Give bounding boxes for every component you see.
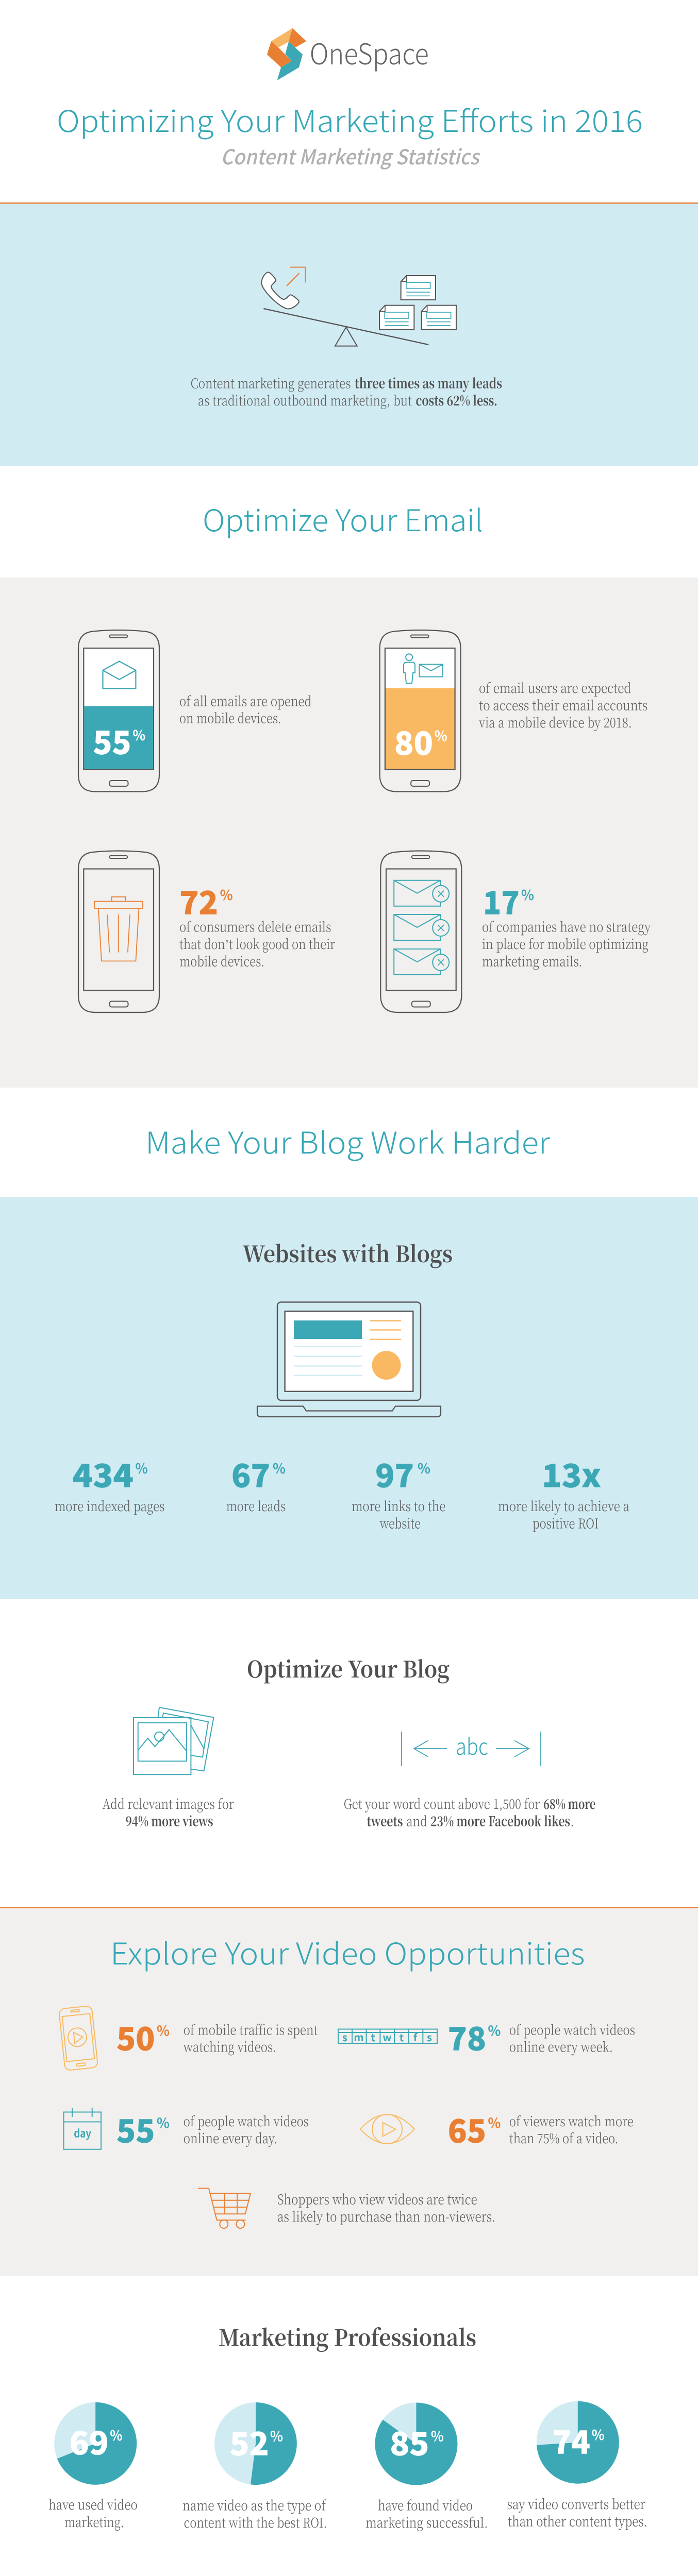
text: word count stat: Get your word count above 1,500 for [344,1794,540,1813]
stat: 97 percent: 97 [375,1450,414,1497]
text: word count stat: tweets [367,1811,403,1831]
subheading: marketing professionals: Marketing Professionals [219,2319,476,2352]
icon: week calendar: m [354,2029,364,2044]
stat: 67 percent: 67 [231,1450,270,1497]
icon: laptop [257,1302,441,1417]
text: content marketing stat: costs 62% less. [416,391,497,410]
text: 69 percent label: have used video [48,2495,138,2514]
pie chart: 85 percent: % [431,2426,444,2446]
phone: 80 percent: % [435,725,447,745]
icon: week calendar: f [413,2029,418,2044]
icon: week calendar: t [400,2029,404,2044]
pie chart: 52 percent: 52 [230,2418,269,2464]
stat: 13x: positive ROI [533,1514,599,1533]
text: shoppers stat [277,2189,495,2226]
icon: week calendar: t [371,2029,375,2044]
panel: email stats [0,578,698,1088]
text: images stat [103,1794,234,1831]
text: 52 percent label [182,2496,327,2532]
phone: trash can [78,851,159,1012]
text: content marketing stat: as traditional outbound marketing, but [198,391,412,410]
icon: week calendar: s [342,2029,347,2044]
stat: 50 percent: watching videos. [183,2037,276,2056]
phone: 80 percent [380,630,461,791]
icon: word count arrows [402,1728,541,1766]
text: 55 percent [179,691,311,727]
heading: make your blog work harder: Make Your Blog Work Harder [145,1119,550,1162]
pie chart: 74 percent: 74 [553,2416,590,2463]
text: 74 percent label [507,2494,647,2531]
text: 80 percent: of email users are expected [479,678,631,697]
stat: 13x: more likely to achieve a [498,1496,629,1515]
stat: 65 percent video: 65 [448,2105,486,2151]
icon: word count arrows: abc [456,1728,488,1761]
header logo: OneSpace [310,31,429,73]
text: 55 percent: on mobile devices. [179,708,281,727]
stat: 65 percent video: than 75% of a video. [509,2128,618,2147]
text: 17 percent [482,877,651,970]
text: 52 percent label: name video as the type of [182,2496,327,2515]
text: images stat: 94% more views [126,1811,213,1831]
text: 85 percent label: have found video [378,2496,473,2515]
stat: 67 percent: more leads [226,1496,286,1515]
stat: 55 percent video: % [157,2112,170,2132]
stat: 50 percent: 50 [117,2013,155,2060]
text: word count stat: . [570,1811,574,1831]
stat: 434 percent: 434 [73,1450,134,1497]
stat: 434 percent [55,1450,165,1515]
icon: photos [134,1707,213,1774]
text: content marketing stat [191,373,502,410]
text: 52 percent label: content with the best ROI. [184,2513,327,2532]
icon: week calendar: s [427,2029,432,2044]
stat: 67 percent [226,1450,286,1515]
stat: 50 percent: % [157,2020,170,2040]
pie chart: 85 percent: 85 [390,2418,429,2464]
phone: 55 percent: % [132,724,145,744]
text: images stat: Add relevant images for [103,1794,234,1813]
phone: 55 percent [78,630,159,791]
text: 72 percent: that don’t look good on their [179,934,335,953]
text: word count stat: 23% more Facebook likes [430,1811,570,1831]
text: 85 percent label: marketing successful. [365,2513,488,2532]
phone: 80 percent: 80 [394,718,433,764]
stat: 55 percent video [117,2105,309,2151]
pie chart: 74 percent: % [592,2424,605,2444]
text: 72 percent: 72 [179,877,218,923]
text: 69 percent label: marketing. [64,2512,124,2531]
stat: 50 percent [117,2013,318,2060]
text: 17 percent: marketing emails. [482,951,583,970]
stat: 97 percent: more links to the [352,1496,445,1515]
pie chart: 85 percent [375,2402,457,2485]
stat: 78 percent: % [488,2020,501,2040]
text: content marketing stat: Content marketing generates [191,373,351,392]
text: 69 percent label [48,2495,138,2531]
panel: content marketing leads [0,202,698,466]
stat: 65 percent video: of viewers watch more [509,2111,634,2130]
stat: 97 percent [352,1450,445,1533]
text: 72 percent: % [220,884,233,904]
text: 80 percent [478,678,647,732]
text: content marketing stat: three times as many leads [355,373,502,392]
pie chart: 69 percent: 69 [70,2417,109,2464]
pie chart: 52 percent: % [270,2426,283,2446]
text: 72 percent: of consumers delete emails [179,917,331,936]
stat: 434 percent: more indexed pages [55,1496,165,1515]
text: 80 percent: to access their email accounts [479,696,647,714]
icon: tilted phone [59,2006,98,2071]
text: shoppers stat: as likely to purchase than non-viewers. [277,2207,495,2226]
panel: video opportunities [0,1907,698,2276]
text: 17 percent: of companies have no strategy [482,917,651,936]
phone: 55 percent: 55 [93,717,131,764]
text: 55 percent: of all emails are opened [179,691,311,710]
pie chart: 52 percent [214,2402,297,2485]
text: 72 percent [179,877,335,970]
stat: 55 percent video: online every day. [184,2128,277,2147]
icon: eye with play [360,2114,414,2144]
stat: 65 percent video [448,2105,634,2151]
icon: week calendar: w [383,2029,392,2044]
stat: 55 percent video: 55 [117,2105,155,2151]
subtitle: Content Marketing Statistics [221,141,481,171]
stat: 55 percent video: of people watch videos [184,2111,309,2130]
phone: undelivered emails [380,851,461,1012]
stat: 78 percent [448,2013,635,2060]
pie chart: 74 percent [537,2401,619,2484]
subheading: websites with blogs: Websites with Blogs [243,1236,453,1269]
stat: 78 percent: of people watch videos [509,2020,635,2039]
stat: 97 percent: website [379,1514,421,1533]
stat: 50 percent: of mobile traffic is spent [184,2020,318,2039]
title: Optimizing Your Marketing Efforts in 2016 [57,97,643,141]
text: word count stat: 68% more [543,1794,595,1813]
stat: 13x [498,1450,629,1533]
panel: websites with blogs [0,1197,698,1599]
stat: 78 percent: 78 [448,2013,486,2060]
stat: 434 percent: % [135,1458,148,1478]
pie chart: 69 percent [54,2402,137,2485]
stat: 67 percent: % [273,1458,286,1478]
subheading: optimize your blog: Optimize Your Blog [247,1651,450,1684]
heading: explore your video opportunities: Explore Your Video Opportunities [110,1930,585,1973]
text: word count stat: and [406,1811,427,1831]
text: 17 percent: in place for mobile optimizing [482,934,649,953]
text: 17 percent: % [521,884,534,904]
text: 85 percent label [365,2496,488,2532]
text: 17 percent: 17 [483,877,520,923]
icon: shopping cart [198,2189,251,2228]
text: shoppers stat: Shoppers who view videos are twice [277,2189,477,2208]
text: 74 percent label: than other content types. [508,2511,647,2531]
stat: 78 percent: online every week. [509,2037,613,2056]
pie chart: 69 percent: % [110,2425,123,2445]
icon: day calendar: day [74,2126,91,2141]
icon: day calendar [64,2108,101,2149]
icon: week calendar [338,2029,437,2044]
stat: 97 percent: % [418,1458,430,1478]
text: 74 percent label: say video converts better [507,2494,645,2513]
icon: seesaw with phone and documents [261,267,456,346]
stat: 13x: 13x [542,1450,601,1497]
stat: 65 percent video: % [488,2112,501,2132]
header logo [267,28,429,80]
heading: optimize your email: Optimize Your Email [203,497,483,540]
text: word count stat [344,1794,595,1831]
text: 72 percent: mobile devices. [179,951,264,970]
text: 80 percent: via a mobile device by 2018. [478,713,632,732]
